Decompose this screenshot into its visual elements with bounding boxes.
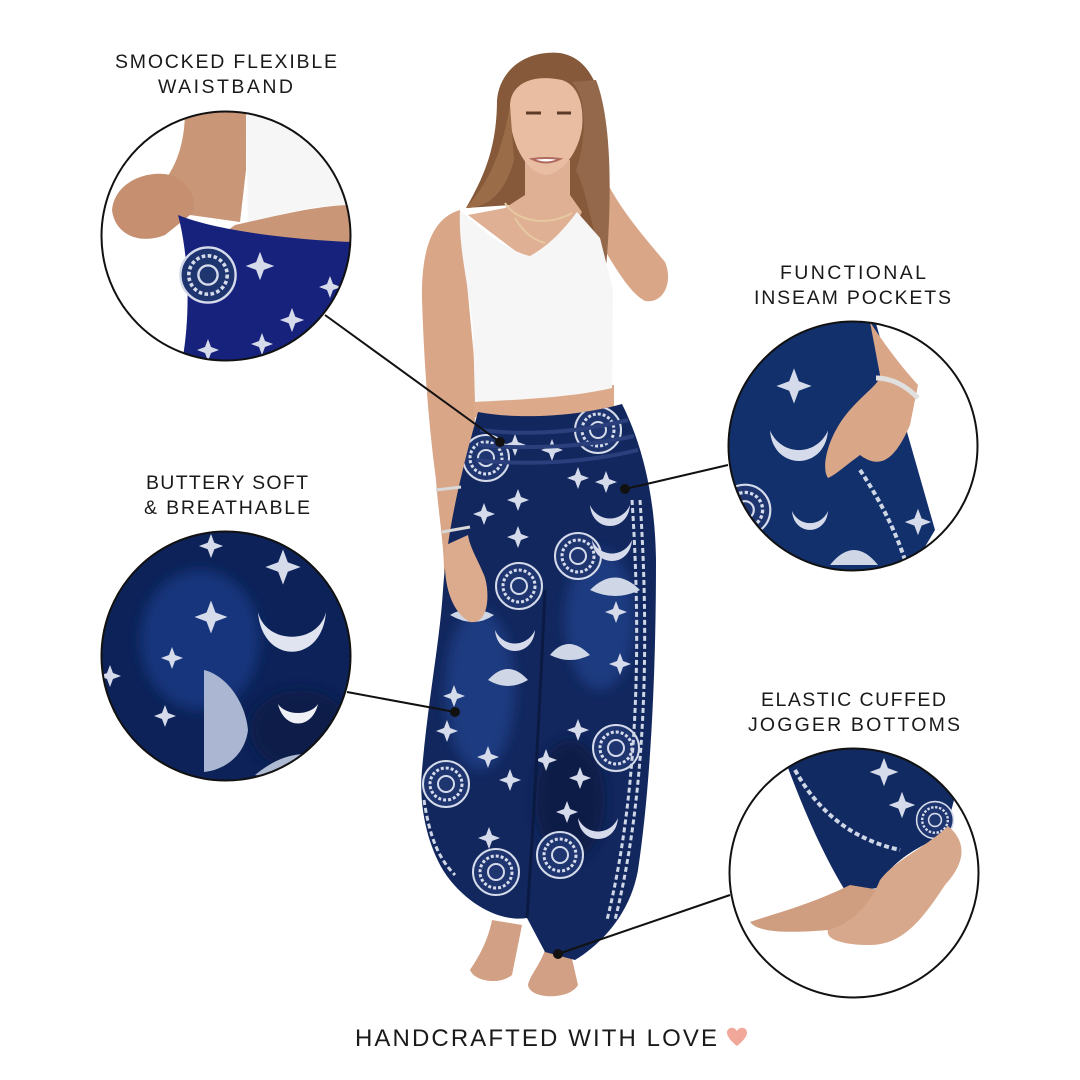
connector: cuffs [553,895,730,959]
bracelets [436,487,470,532]
heading: elastic cuffed jogger bottoms: ELASTIC CUFFED [761,689,946,711]
connector: fabric [347,692,460,717]
heading: functional inseam pockets [754,262,951,309]
necklaces [505,203,572,243]
heading: elastic cuffed jogger bottoms [748,689,960,736]
heading: functional inseam pockets: FUNCTIONAL [780,262,926,284]
face [510,78,582,175]
feet [470,920,522,981]
figure: model wearing harem pants [421,53,668,996]
left arm [422,210,487,622]
hand on thigh [445,535,487,622]
heading: buttery soft and breathable: & BREATHABLE [144,497,310,519]
footer tagline: HANDCRAFTED WITH LOVE [355,1025,717,1052]
white crop top [460,210,613,402]
heading: smocked flexible waistband: SMOCKED FLEXIBLE [115,51,337,73]
neck and chest [468,160,582,262]
icon: heart [727,1028,747,1046]
circle detail: fabric [99,530,352,782]
heading: elastic cuffed jogger bottoms: JOGGER BOTTOMS [748,714,960,736]
circle detail: waistband [100,110,352,362]
heading: functional inseam pockets: INSEAM POCKETS [754,287,951,309]
connector: waistband [325,315,505,447]
right arm [588,188,668,301]
hair back [466,53,606,270]
pants pattern [423,407,645,920]
circle detail: pockets [720,320,980,572]
heading: smocked flexible waistband [115,51,337,98]
heading: buttery soft and breathable [144,472,310,519]
connector: pockets [620,465,728,494]
heading: smocked flexible waistband: WAISTBAND [158,76,293,98]
circle detail: cuffs [729,748,979,998]
hair front strand [466,105,514,208]
heading: buttery soft and breathable: BUTTERY SOFT [146,472,308,494]
midriff [474,385,614,417]
navy pants [421,404,656,960]
